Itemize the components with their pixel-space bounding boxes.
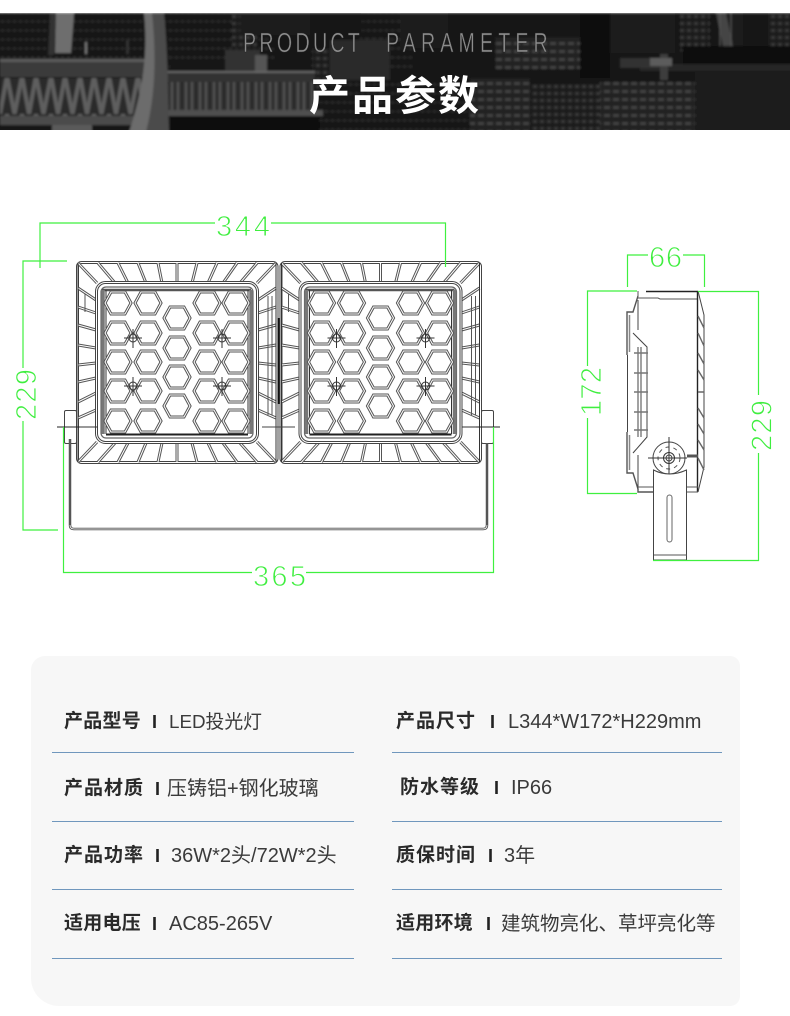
parameter: material: 产品材质 (64, 778, 144, 799)
parameter: environment: 建筑物亮化、草坪亮化等 (501, 913, 716, 935)
parameter: material: 压铸铝+钢化玻璃 (167, 778, 319, 800)
side view (627, 291, 704, 560)
bridge (0, 60, 145, 77)
parameter: size: I (490, 712, 495, 732)
dimension 66 (628, 242, 704, 287)
dimension 365 (64, 427, 494, 593)
parameter: waterproof (400, 776, 552, 799)
parameter: size: 产品尺寸 (396, 711, 476, 732)
parameter: warranty: I (488, 846, 493, 866)
english subtitle (243, 28, 548, 59)
front view: lamp head left (78, 262, 277, 462)
dimension 229 left (11, 261, 67, 530)
dimension 344 (40, 211, 446, 268)
parameter: power (64, 844, 337, 867)
parameter: power: 产品功率 (64, 845, 144, 866)
english subtitle: PRODUCT (243, 28, 360, 59)
parameter: waterproof: IP66 (511, 777, 552, 799)
parameter: size (396, 710, 701, 733)
dimension 229 right (653, 292, 778, 560)
parameter: size: L344*W172*H229mm (508, 711, 701, 733)
parameter: power: 36W*2头/72W*2头 (171, 845, 337, 867)
parameter: model (64, 710, 262, 732)
parameter: warranty: 质保时间 (396, 845, 476, 866)
parameter: voltage: 适用电压 (64, 913, 141, 934)
parameter: voltage: AC85-265V (169, 913, 272, 935)
dimension 344: 344 (216, 211, 270, 243)
dimension 229 left: 229 (11, 369, 43, 420)
parameter: waterproof: I (494, 778, 499, 798)
parameter: voltage (64, 912, 272, 935)
parameter: model: I (152, 712, 157, 732)
parameter: material (64, 778, 319, 800)
parameter: warranty: 3年 (504, 845, 535, 867)
parameter: waterproof: 防水等级 (400, 777, 480, 798)
parameter: model: LED投光灯 (169, 711, 262, 732)
banner base (0, 13, 790, 133)
parameter: environment: 适用环境 (396, 913, 473, 934)
dimension 229 right: 229 (746, 400, 778, 451)
parameter: power: I (155, 846, 160, 866)
banner: city night background with titles (0, 13, 790, 130)
dimension 172 (576, 291, 637, 494)
dimension 66: 66 (649, 242, 682, 274)
parameter: warranty (396, 844, 535, 867)
english subtitle: PARAMETER (386, 28, 548, 59)
stray mark (4, 650, 6, 651)
parameter: voltage: I (152, 914, 157, 934)
parameter: environment (396, 912, 716, 935)
chinese title: 产品参数 (309, 73, 481, 119)
dimension 172: 172 (576, 367, 608, 416)
front view: mounting bracket (57, 410, 500, 529)
parameter: model: 产品型号 (64, 711, 141, 732)
panel: parameter table (31, 656, 740, 1006)
dimension 365: 365 (253, 561, 306, 593)
center seam (57, 318, 500, 427)
parameter: material: I (155, 779, 160, 799)
front view: lamp head right (281, 262, 480, 462)
technical drawing: front and side views (11, 211, 778, 593)
parameter: environment: I (486, 914, 491, 934)
